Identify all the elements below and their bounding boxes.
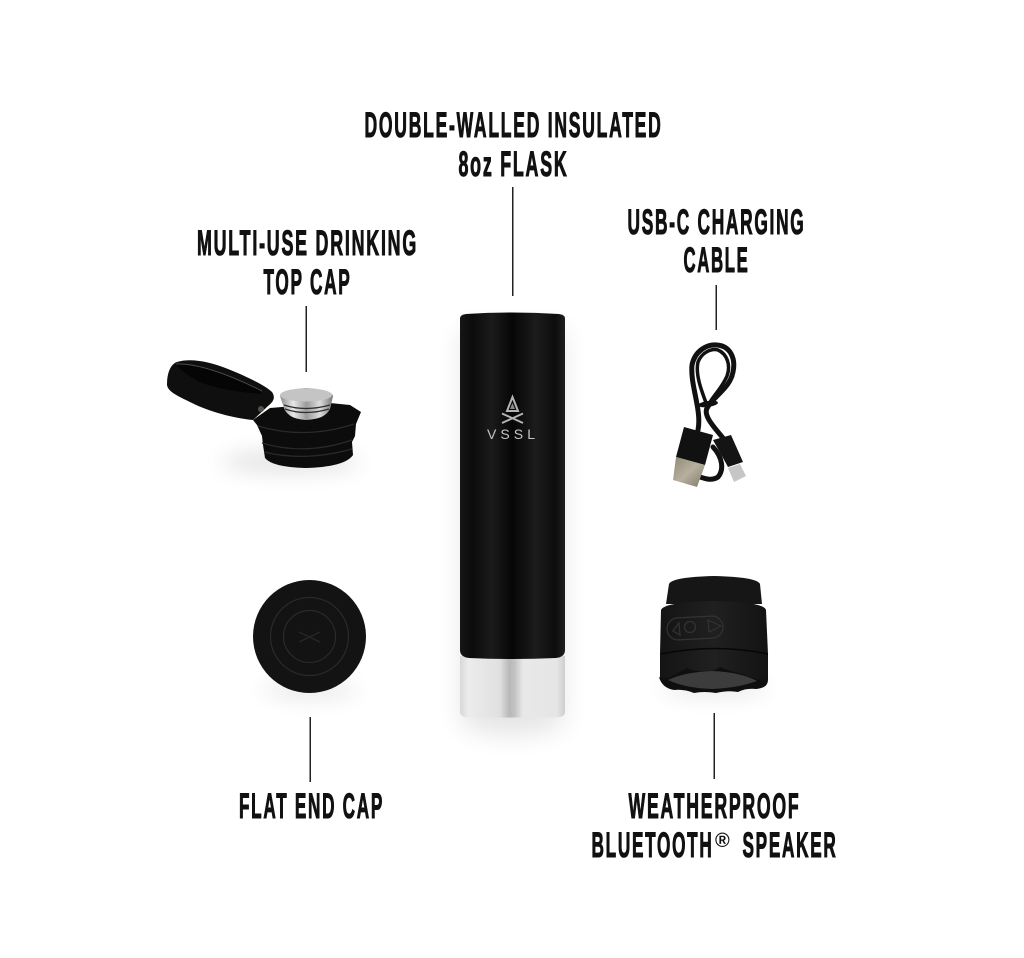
usb-c plug: [713, 435, 746, 482]
cap logo: [299, 632, 320, 642]
usb-a plug: [673, 427, 713, 487]
text: USB-C CHARGING: [628, 203, 806, 242]
flask: [460, 312, 565, 735]
heading: top cap label: TOP CAP: [264, 263, 352, 302]
heading: speaker label: WEATHERPROOF: [628, 787, 800, 826]
top cap: [167, 360, 361, 472]
heading: speaker label: [592, 787, 838, 865]
text: SPEAKER: [742, 826, 838, 865]
threaded base: [253, 403, 361, 468]
text: FLAT END CAP: [239, 787, 384, 826]
steel button: [280, 388, 333, 420]
leader line: flask: [512, 187, 514, 296]
speaker buttons: [666, 616, 724, 640]
leader line: top cap: [306, 306, 307, 372]
heading: cable label: [628, 203, 806, 280]
speaker top ring: [666, 576, 762, 604]
heading: flask label: 8oz FLASK: [458, 145, 568, 184]
leader line: speaker: [714, 713, 715, 779]
leader line: cable: [716, 285, 717, 330]
flat end cap: [253, 580, 366, 698]
speaker grille foot: [659, 667, 768, 693]
speaker: [659, 576, 768, 696]
heading: speaker label: BLUETOOTH: [592, 826, 714, 865]
heading: flask label: [364, 106, 662, 184]
flask silver base: [460, 656, 565, 718]
heading: speaker label: ®: [715, 830, 730, 852]
heading: flask label: DOUBLE-WALLED INSULATED: [364, 106, 662, 145]
heading: top cap label: [197, 224, 418, 302]
heading: top cap label: MULTI-USE DRINKING: [197, 224, 418, 263]
usb cable: [673, 345, 746, 487]
logo: [487, 397, 539, 442]
cable loop: [692, 345, 734, 479]
logo: VSSL: [487, 426, 539, 442]
speaker body: [660, 601, 768, 680]
flip lid: [167, 360, 274, 420]
heading: cable label: CABLE: [684, 241, 750, 280]
flask black body: [460, 312, 565, 659]
leader line: end cap: [310, 717, 311, 782]
